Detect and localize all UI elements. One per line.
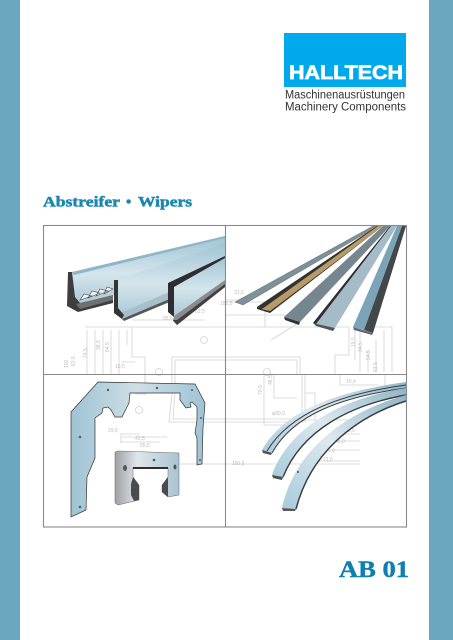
background technical drawing: 31,5 [234, 290, 244, 296]
background technical drawing: 63,5 [373, 362, 379, 372]
background technical drawing: φ89,5 [272, 411, 285, 417]
plate outline [71, 382, 205, 517]
background technical drawing: 74,5 [83, 348, 89, 358]
wiper profile 3 [168, 256, 225, 325]
background technical drawing: 70,5 [258, 385, 264, 395]
background technical drawing: 10,5 [115, 364, 125, 370]
background technical drawing: 38,8 [96, 340, 102, 350]
background technical drawing: 150,5 [232, 461, 245, 467]
background technical drawing: 84,5 [105, 342, 111, 352]
logo: HALLTECH: HALLTECH [289, 62, 403, 84]
company descriptor [285, 90, 406, 114]
title: Abstreifer [43, 194, 120, 210]
title [43, 194, 192, 210]
background technical drawing: 65,5 [163, 316, 173, 322]
company descriptor: Machinery Components [285, 102, 406, 114]
title: Wipers [138, 194, 192, 210]
curved wiper 3 [282, 395, 406, 511]
block channel profile [131, 477, 168, 501]
background technical drawing: 61,0 [325, 448, 335, 454]
background technical drawing: 42,5 [135, 436, 145, 442]
background technical drawing: 55,5 [140, 443, 150, 449]
background technical drawing: 48,5 [268, 375, 274, 385]
title: • [126, 194, 131, 210]
background technical drawing: 181,5 [220, 301, 233, 307]
background technical drawing: 46,0 [335, 439, 345, 445]
curved wiper 1 [262, 382, 406, 455]
curved wiper 2 [272, 388, 406, 480]
background technical drawing: 62,5 [195, 309, 205, 315]
rail profile grey [235, 226, 378, 305]
logo: HALLTECH [284, 33, 406, 87]
company descriptor: Maschinenausrüstungen [285, 90, 405, 102]
background technical drawing: 63,5 [71, 356, 77, 366]
background technical drawing: 10,4 [346, 379, 356, 385]
panel: rail profiles [235, 226, 406, 335]
plate holes [79, 387, 202, 508]
background technical drawing: 19,5 [351, 337, 357, 347]
document code: AB 01 [339, 557, 409, 582]
rail profile gold [257, 226, 383, 313]
panel: wiper block [115, 451, 179, 505]
left sidebar [0, 0, 20, 640]
block body [115, 451, 179, 505]
background technical drawing: 23,5 [345, 428, 355, 434]
right sidebar [429, 0, 453, 640]
background technical drawing: 29,5 [108, 428, 118, 434]
wiper profile 2 [114, 243, 225, 321]
panel: straight wiper profiles [67, 236, 225, 325]
background technical drawing [64, 290, 392, 467]
background technical drawing: 54,5 [366, 350, 372, 360]
background technical drawing: 100 [64, 359, 70, 368]
panel frame [44, 226, 406, 527]
rail profile dark grey [284, 226, 390, 325]
background technical drawing: 71,5 [323, 457, 333, 463]
block holes [123, 459, 176, 471]
panel: large wiper plate [71, 382, 205, 517]
rail profile blue with dark edge [353, 226, 406, 335]
rail profile light blue [313, 226, 397, 331]
panel: curved wipers [262, 382, 406, 511]
background technical drawing: 34,5 [358, 342, 364, 352]
wiper profile 1 [67, 236, 225, 312]
